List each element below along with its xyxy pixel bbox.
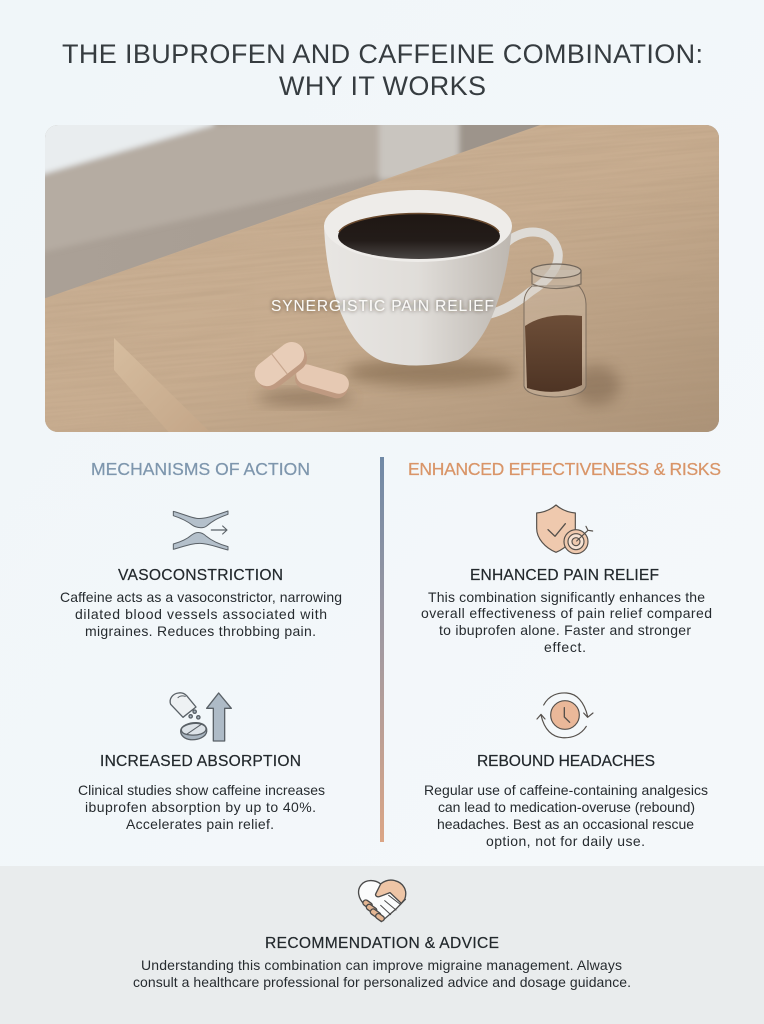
title: WHY IT WORKS [279, 71, 486, 101]
text: absorption: Accelerates pain relief. [126, 816, 274, 832]
pills [254, 342, 349, 398]
shadows [345, 358, 515, 386]
text: recommendation: consult a healthcare professional for personalized advice and dosage guidance. [133, 974, 631, 990]
panel: recommendation and advice [0, 866, 764, 1024]
right column heading: ENHANCED EFFECTIVENESS & RISKS [408, 459, 721, 479]
left column heading: MECHANISMS OF ACTION [91, 459, 310, 479]
icon: vasoconstriction [173, 511, 228, 550]
title [62, 39, 703, 101]
subheading: enhanced pain relief: ENHANCED PAIN RELIEF [470, 567, 659, 584]
text: vasoconstriction: migraines. Reduces throbbing pain. [85, 623, 316, 639]
text: rebound headaches: headaches. Best as an occasional rescue [437, 816, 694, 832]
text: recommendation: Understanding this combination can improve migraine management. Always [141, 957, 622, 973]
text: enhanced pain relief: effect. [544, 639, 586, 655]
text: recommendation [133, 957, 631, 990]
text: enhanced pain relief [421, 589, 712, 655]
vial [524, 264, 586, 397]
icon: heart-shaped handshake [359, 880, 406, 922]
text: vasoconstriction [60, 589, 342, 639]
text: absorption: ibuprofen absorption by up to 40%. [85, 799, 316, 815]
text: absorption [78, 782, 325, 832]
subheading: recommendation: RECOMMENDATION & ADVICE [265, 935, 499, 952]
center divider [380, 457, 384, 842]
text: enhanced pain relief: This combination significantly enhances the [428, 589, 705, 605]
table slab side [114, 338, 183, 432]
text: vasoconstriction: dilated blood vessels associated with [75, 606, 327, 622]
text: rebound headaches [424, 782, 708, 849]
text: rebound headaches: option, not for daily use. [486, 833, 645, 849]
hero photo: coffee cup, pills and powder vial on a wooden table [45, 125, 719, 432]
text: vasoconstriction: Caffeine acts as a vasoconstrictor, narrowing [60, 589, 342, 605]
subheading: absorption: INCREASED ABSORPTION [100, 753, 301, 770]
subheading: rebound headaches: REBOUND HEADACHES [477, 753, 655, 770]
icon: clock with circular arrows [537, 693, 593, 738]
cup [324, 190, 512, 366]
cup handle [490, 232, 558, 314]
text: enhanced pain relief: to ibuprofen alone. Faster and stronger [439, 622, 691, 638]
text: absorption: Clinical studies show caffeine increases [78, 782, 325, 798]
icon: absorption capsule, tablet and arrow [170, 693, 231, 741]
text: rebound headaches: Regular use of caffeine-containing analgesics [424, 782, 708, 798]
title: THE IBUPROFEN AND CAFFEINE COMBINATION: [62, 39, 703, 69]
icon: shield with target [537, 505, 593, 554]
text: enhanced pain relief: overall effectiveness of pain relief compared [421, 605, 712, 621]
text: rebound headaches: can lead to medication-overuse (rebound) [438, 799, 695, 815]
photo caption: SYNERGISTIC PAIN RELIEF [271, 298, 494, 315]
table surface [40, 123, 725, 440]
subheading: vasoconstriction: VASOCONSTRICTION [118, 567, 283, 584]
